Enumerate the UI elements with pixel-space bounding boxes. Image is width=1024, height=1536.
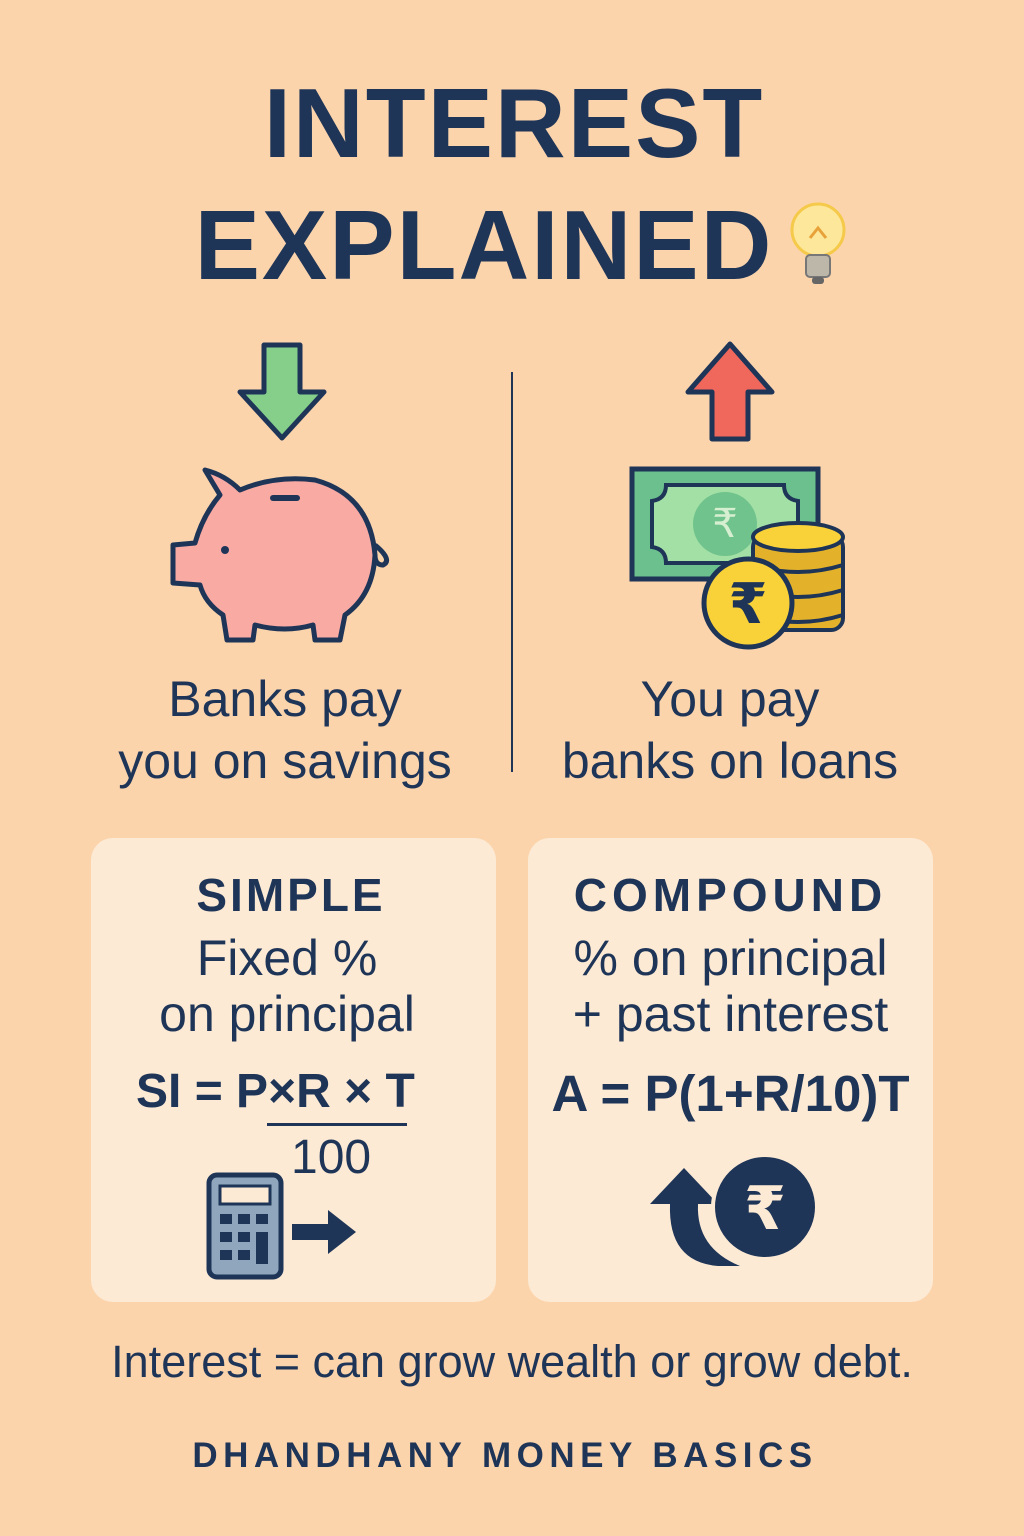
text: banks pay you: Banks pay xyxy=(168,671,402,727)
footer: DHANDHANY MONEY BASICS xyxy=(192,1436,818,1475)
text: fixed %: Fixed % xyxy=(197,930,377,986)
icon: money and coins xyxy=(630,466,845,650)
heading: compound: COMPOUND xyxy=(574,869,887,921)
panel: simple: 100 xyxy=(291,1131,371,1184)
text: summary: Interest = can grow wealth or grow debt. xyxy=(111,1336,913,1387)
text: fixed % xyxy=(159,930,415,1042)
title: INTEREST xyxy=(264,68,764,178)
icon: money and coins: ₹ xyxy=(729,572,767,637)
formula: SI: SI = P×R × T xyxy=(136,1065,415,1118)
panel: compound xyxy=(528,838,933,1302)
icon: calculator with arrow xyxy=(206,1172,356,1280)
text: % on principal: + past interest xyxy=(573,986,888,1042)
divider line xyxy=(511,372,513,772)
text: % on principal xyxy=(573,930,888,1042)
panel: simple xyxy=(91,838,496,1302)
text: banks pay you xyxy=(118,671,452,789)
icon: compound rupee arrow xyxy=(650,1157,815,1266)
icon: red up arrow xyxy=(686,342,774,442)
text: you pay banks: You pay xyxy=(641,671,819,727)
title: EXPLAINED xyxy=(195,190,773,300)
text: you pay banks: banks on loans xyxy=(562,733,898,789)
text: % on principal: % on principal xyxy=(573,930,888,986)
formula: A: A = P(1+R/10)T xyxy=(551,1065,910,1122)
text: fixed %: on principal xyxy=(159,986,415,1042)
icon: green down arrow xyxy=(238,342,326,440)
text: you pay banks xyxy=(562,671,898,789)
icon: compound rupee arrow: ₹ xyxy=(744,1174,786,1244)
heading: simple: SIMPLE xyxy=(196,869,386,921)
title xyxy=(195,68,773,300)
icon: money and coins: ₹ xyxy=(712,501,738,547)
icon: light bulb xyxy=(790,202,846,284)
text: banks pay you: you on savings xyxy=(118,733,452,789)
icon: piggy bank xyxy=(170,468,390,642)
